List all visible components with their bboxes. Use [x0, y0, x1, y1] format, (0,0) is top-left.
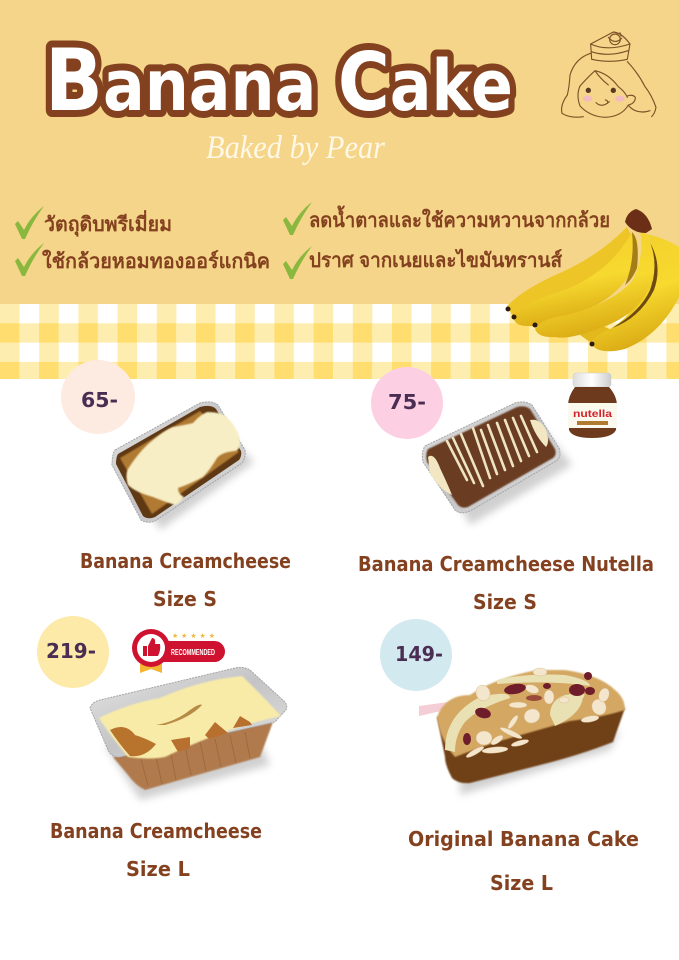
product name: original banana cake size L: Original Banana Cake — [408, 827, 639, 851]
price badge: 75: 75- — [388, 390, 426, 414]
check icon 1 — [15, 206, 44, 239]
product photo: banana creamcheese size L — [90, 667, 287, 800]
product name: original banana cake size L: Size L — [490, 871, 553, 895]
product photo: original banana cake size L — [419, 668, 625, 795]
title: Banana Cake — [45, 31, 513, 131]
price badge: 65 — [61, 360, 135, 434]
benefit text 3: ลดน้ำตาลและใช้ความหวานจากกล้วย — [309, 205, 610, 232]
header background panel — [0, 0, 679, 304]
icon: nutella jar: nutella — [573, 409, 613, 420]
recommended badge: RECOMMENDED — [171, 648, 215, 657]
icon: nutella jar — [568, 373, 617, 438]
check icon 2 — [15, 243, 44, 276]
price badge: 219 — [37, 616, 109, 688]
price badge: 149 — [380, 619, 452, 691]
product name: banana creamcheese nutella size S: Size S — [473, 590, 537, 614]
icon: banana bunch — [506, 209, 679, 351]
product name: banana creamcheese nutella size S — [358, 552, 654, 614]
benefit text 2: ใช้กล้วยหอมทองออร์แกนิค — [42, 249, 270, 273]
check icon 3 — [283, 202, 312, 235]
product name: banana creamcheese size L: Banana Creamcheese — [50, 819, 262, 843]
product name: banana creamcheese size S: Size S — [153, 587, 217, 611]
product photo: banana creamcheese size S — [112, 402, 254, 530]
product name: banana creamcheese size L: Size L — [126, 857, 190, 881]
price badge: 149: 149- — [395, 642, 443, 666]
recommended badge — [132, 629, 225, 673]
price badge: 65: 65- — [81, 388, 118, 412]
benefit text 4: ปราศ จากเนยและไขมันทรานส์ — [309, 248, 563, 272]
price badge: 75 — [371, 367, 443, 439]
product name: banana creamcheese size L — [50, 819, 262, 881]
product name: banana creamcheese nutella size S: Banana Creamcheese Nutella — [358, 552, 654, 576]
benefit text 1: วัตถุดิบพรีเมี่ยม — [44, 209, 172, 237]
check icon 4 — [283, 246, 312, 279]
recommended badge: ★★★★★ — [172, 632, 215, 640]
benefits list — [15, 202, 610, 279]
subtitle: Baked by Pear — [206, 130, 385, 166]
product name: banana creamcheese size S: Banana Creamcheese — [80, 549, 291, 573]
product name: banana creamcheese size S — [80, 549, 291, 611]
product photo: banana creamcheese nutella size S — [422, 402, 572, 525]
icon: girl with cake on head — [562, 32, 656, 117]
product name: original banana cake size L — [408, 827, 639, 895]
price badge: 219: 219- — [46, 639, 96, 663]
gingham checker band — [0, 304, 679, 379]
